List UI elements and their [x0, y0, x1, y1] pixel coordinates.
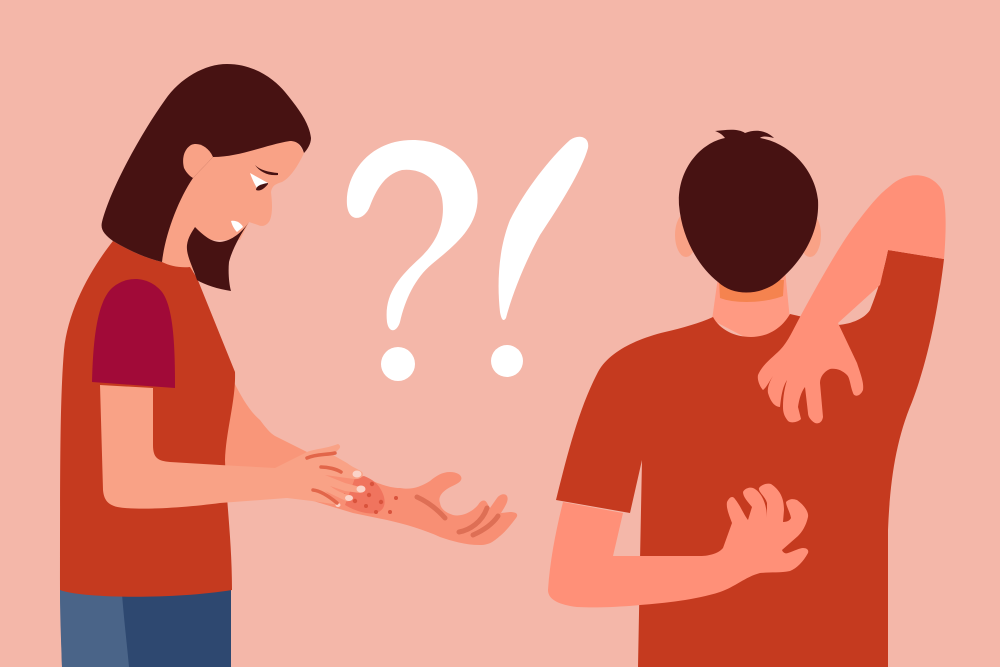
- neck: [712, 270, 790, 345]
- question mark: [347, 140, 478, 381]
- ears: [675, 213, 821, 257]
- hair: [102, 64, 311, 262]
- exclamation dot: [491, 345, 523, 377]
- jeans: [60, 588, 231, 667]
- tooth: [231, 221, 243, 232]
- head and face: [190, 130, 304, 240]
- figure: man: [548, 130, 946, 667]
- palm streak one: [459, 508, 487, 532]
- near arm and holding hand: [100, 385, 366, 509]
- inspected forearm and hand: [310, 462, 517, 545]
- far arm: [222, 378, 307, 472]
- raised arm and hand: [758, 175, 946, 423]
- rash patch: [345, 476, 385, 514]
- shirt: [556, 250, 944, 667]
- ear: [183, 144, 213, 178]
- lower hair: [187, 222, 249, 291]
- forearm streak: [417, 497, 445, 518]
- eyebrow: [255, 165, 278, 175]
- nails: [336, 470, 366, 507]
- neck: [155, 165, 215, 272]
- question dot: [381, 347, 415, 381]
- scratch lines: [307, 453, 341, 503]
- neck shadow: [719, 280, 784, 302]
- lower arm and hand: [548, 484, 808, 607]
- shirt: [60, 241, 235, 597]
- hair: [679, 130, 818, 293]
- figure: woman: [60, 64, 517, 667]
- rash dots: [342, 482, 398, 514]
- palm streak two: [473, 516, 498, 535]
- exclamation mark: [491, 137, 588, 377]
- eye: [250, 173, 268, 191]
- sleeve: [92, 279, 175, 388]
